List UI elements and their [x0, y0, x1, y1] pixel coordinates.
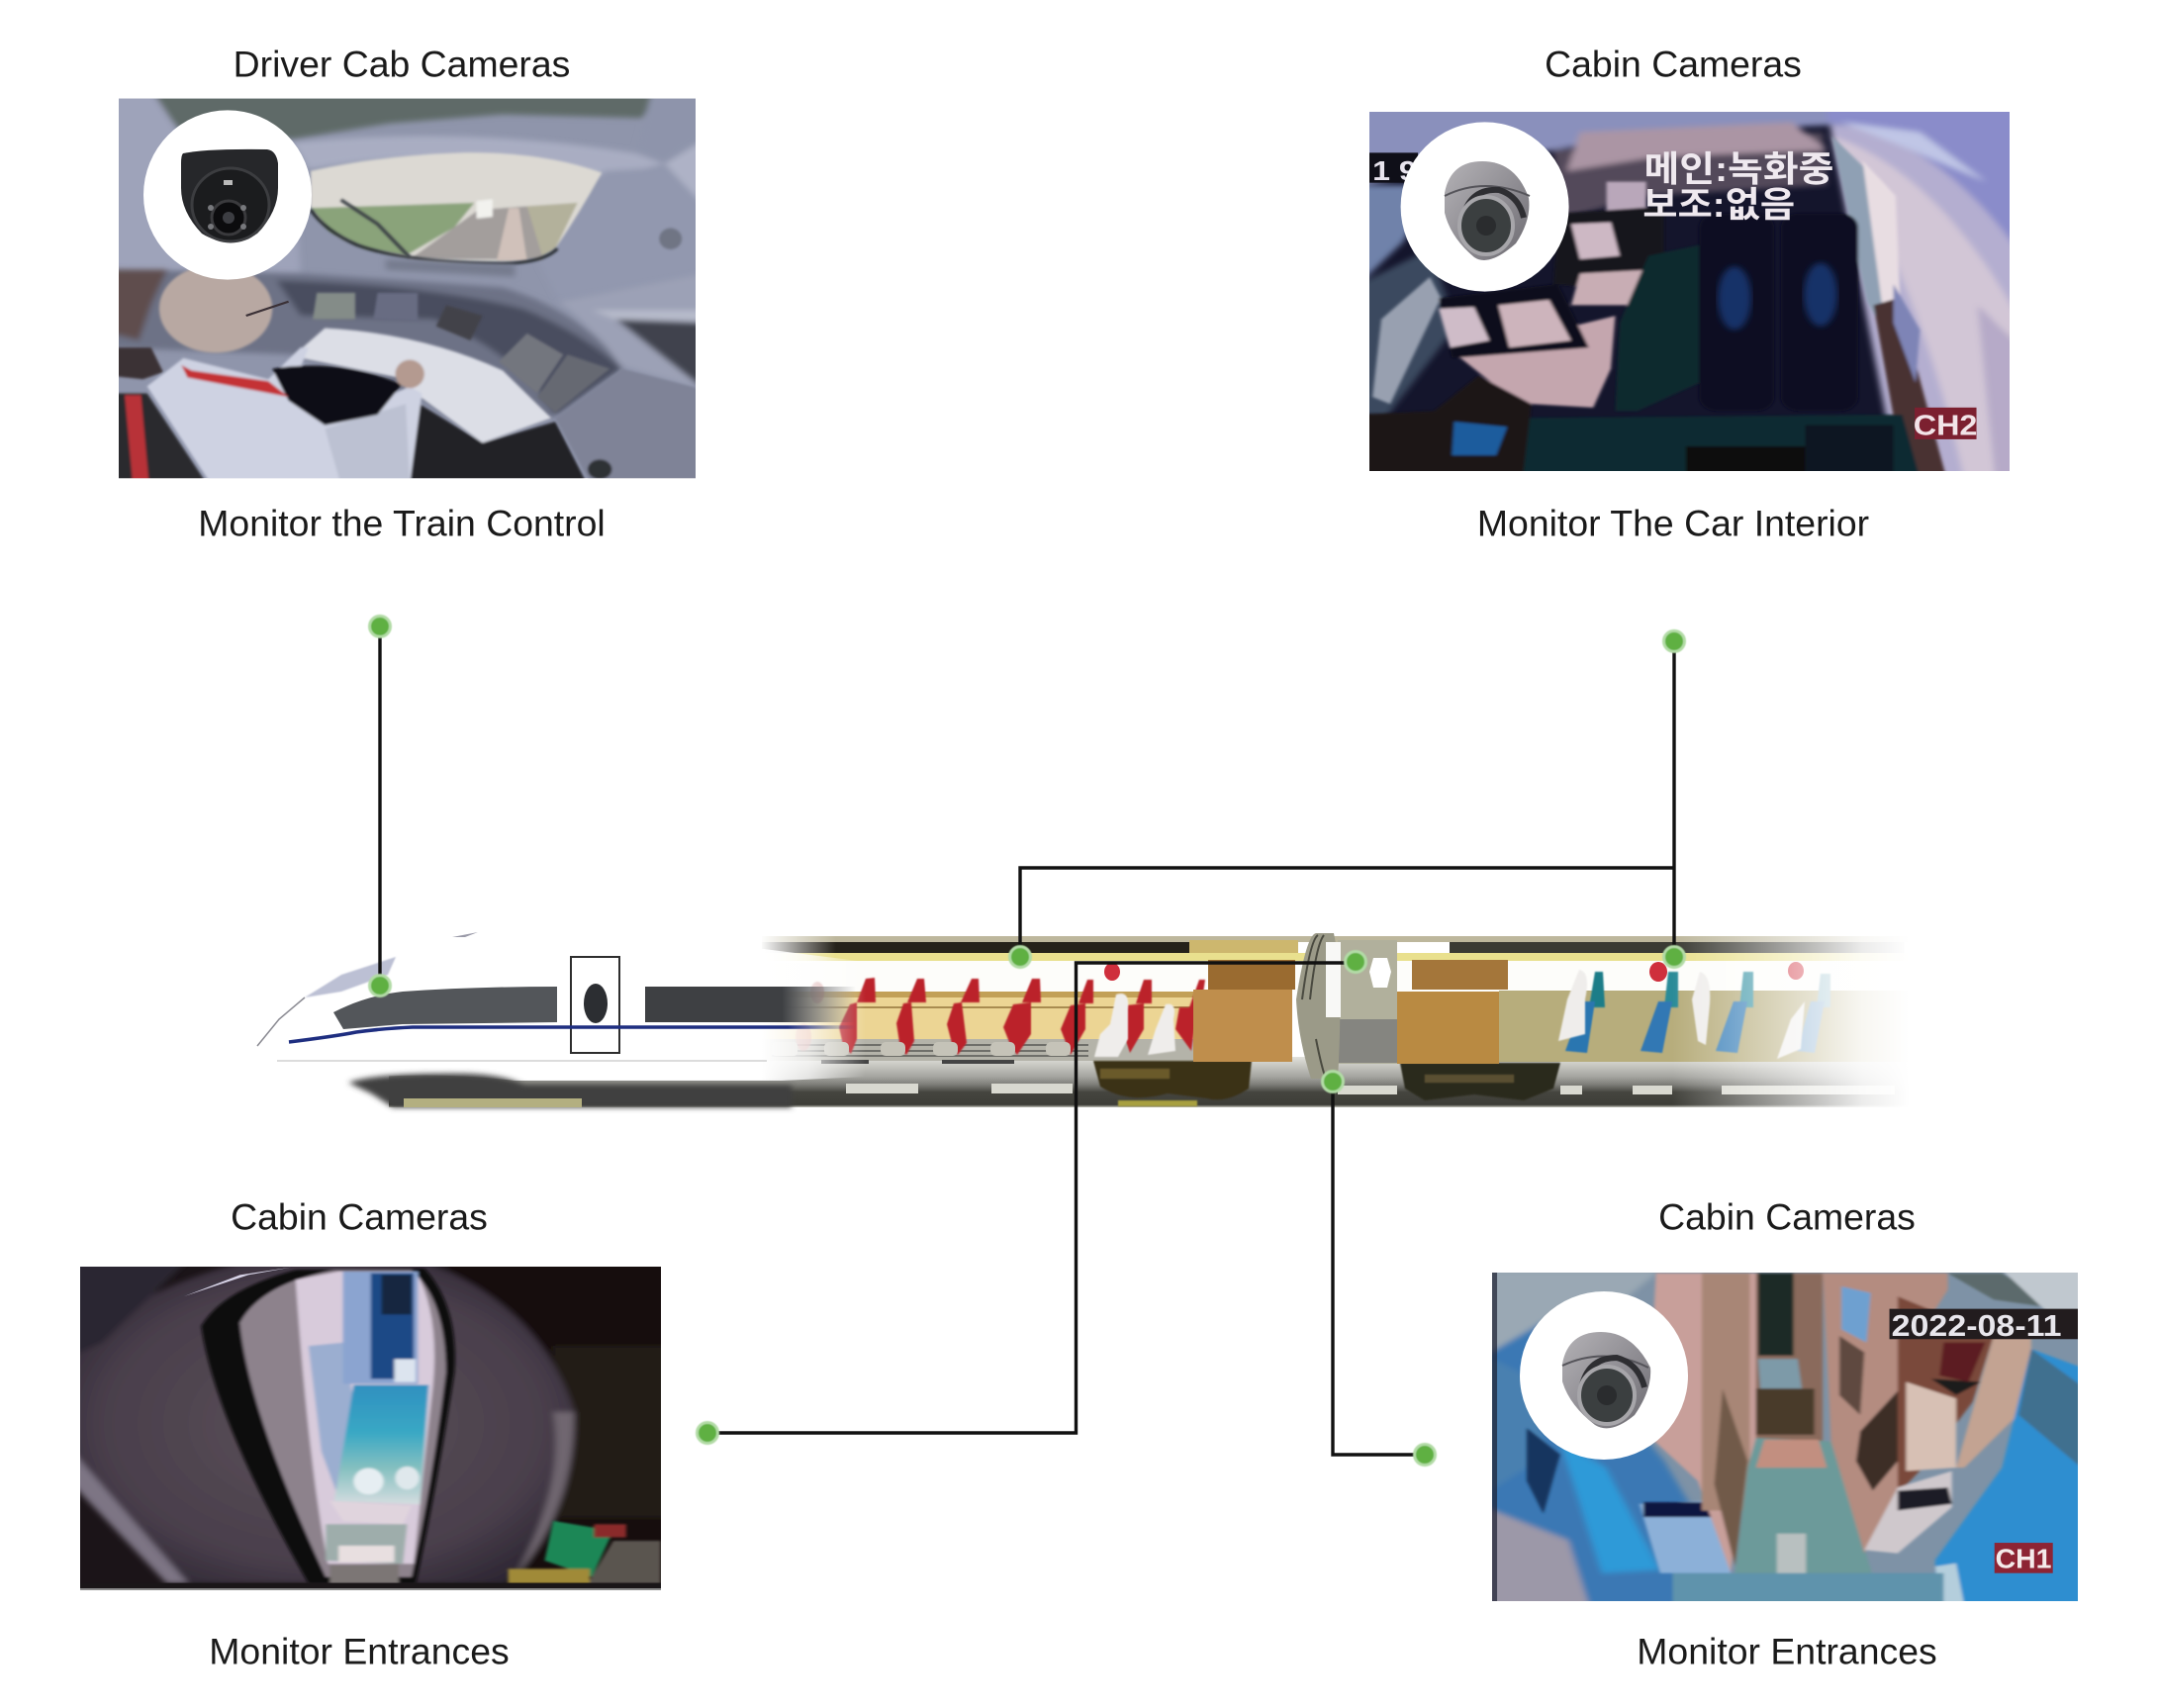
- track dust strip: [404, 1098, 582, 1107]
- roof streak: [452, 932, 478, 937]
- heading: driver cab cameras: Driver Cab Cameras: [234, 44, 570, 85]
- panel: entrance photo right: CH1: [1996, 1543, 2051, 1574]
- gangway connector: [1296, 933, 1397, 1079]
- train underbody: [389, 1057, 1932, 1107]
- panel: entrance photo left: [80, 1267, 661, 1590]
- panel: car interior photo: 메인:녹화중: [1644, 148, 1833, 189]
- top fade at body transition: [760, 930, 836, 963]
- red seats: [796, 978, 1205, 1055]
- red signs: [1104, 962, 1804, 982]
- connector: cabin camera branch lines: [1020, 641, 1674, 957]
- train nose white body: [256, 932, 866, 1084]
- connector: entrance left line: [707, 963, 1356, 1433]
- side windows: [645, 987, 856, 1022]
- icon: silver dome camera in white circle bottom right: [1520, 1291, 1688, 1460]
- green marker dots: [370, 616, 1684, 1465]
- panel: car interior photo: 1 9: [1372, 155, 1417, 186]
- icon: silver dome camera in white circle top right: [1401, 122, 1569, 292]
- passenger silhouettes: [1094, 970, 1805, 1059]
- cab windows: [333, 987, 557, 1029]
- train illustration: [256, 930, 1939, 1118]
- connector: entrance right line: [1333, 1082, 1425, 1455]
- blue stripe: [289, 1027, 856, 1042]
- heading: cabin cameras top right: Cabin Cameras: [1545, 44, 1802, 85]
- heading: cabin cameras bottom right: Cabin Cameras: [1658, 1195, 1916, 1237]
- caption: monitor entrances left: Monitor Entrances: [209, 1631, 510, 1672]
- caption: monitor the car interior: Monitor The Car Interior: [1477, 503, 1869, 544]
- bogies: [1093, 1061, 1560, 1106]
- icon: black dome camera in white circle: [143, 110, 312, 280]
- caption: monitor entrances right: Monitor Entrances: [1637, 1631, 1937, 1672]
- door: [571, 957, 619, 1053]
- underbody panels: [846, 1084, 1895, 1094]
- seat cushions: [772, 1042, 1071, 1056]
- train interior wall: [762, 936, 1929, 1062]
- connector: driver cab line: [378, 626, 382, 986]
- panel: entrance photo right: 2022-08-11: [1892, 1309, 2062, 1343]
- panel: driver cab photo: [119, 99, 696, 479]
- floor line: [277, 1060, 767, 1062]
- panel: entrance photo right: [1492, 1273, 2078, 1601]
- heading: cabin cameras bottom left: Cabin Cameras: [231, 1195, 488, 1237]
- right side fade: [1672, 930, 1939, 1118]
- panel: car interior photo: CH2: [1914, 410, 1977, 441]
- panel: car interior photo: [1369, 112, 2010, 471]
- right car blue seats: [1565, 972, 1830, 1053]
- panel: car interior photo: 보조:없음: [1642, 185, 1795, 225]
- nose outline shading: [257, 997, 305, 1046]
- windshield: [305, 957, 396, 997]
- caption: monitor the train control: Monitor the Train Control: [198, 503, 606, 544]
- wood boxes: [1193, 960, 1508, 1064]
- lower body shadow: [348, 1074, 792, 1107]
